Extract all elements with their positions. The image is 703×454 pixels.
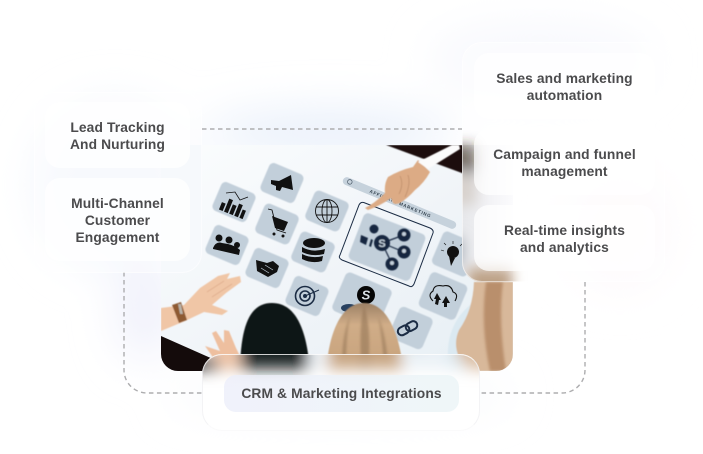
card: multi-channel engagement: Customer [85, 212, 150, 228]
card: sales automation [474, 53, 655, 119]
frosted glass: bottom panel [202, 354, 480, 382]
chart icon [219, 192, 248, 219]
right person hair [448, 282, 513, 371]
card: campaign management: management [521, 164, 608, 178]
panel: right features [462, 42, 665, 282]
network icon: S [378, 238, 386, 250]
card: real-time insights: and analytics [520, 240, 609, 254]
card: multi-channel engagement: Multi-Channel [71, 196, 164, 210]
network icon [360, 224, 410, 270]
megaphone icon [271, 175, 293, 191]
frosted glass: left panel [124, 272, 125, 273]
label: CRM & Marketing Integrations [224, 375, 459, 412]
lower hand [205, 330, 240, 371]
dollar icon [341, 286, 375, 312]
open hand and arm [161, 273, 241, 331]
blonde hair head [326, 303, 404, 375]
panel: integrations [202, 354, 480, 431]
frosted glass: right panel [462, 135, 521, 282]
people icon [213, 234, 240, 255]
card: multi-channel engagement: Engagement [75, 230, 159, 244]
panel: left features [34, 92, 202, 273]
search bar [342, 176, 457, 230]
icon tiles [204, 162, 480, 351]
globe icon [316, 200, 338, 222]
card: lead tracking: And Nurturing [70, 136, 165, 152]
target icon [296, 286, 319, 306]
card: lead tracking [45, 102, 190, 168]
card: sales automation: automation [527, 88, 602, 102]
card: real-time insights: Real-time insights [504, 222, 625, 238]
card: lead tracking: Lead Tracking [70, 120, 165, 134]
pointing hand and sleeve [365, 145, 460, 210]
link icon [396, 320, 419, 337]
database icon [302, 238, 325, 262]
handshake icon [256, 260, 279, 277]
card: real-time insights [474, 205, 655, 271]
label: CRM & Marketing Integrations: CRM & Marketing Integrations [241, 386, 442, 401]
dollar icon: S [362, 288, 371, 302]
card: campaign management [474, 129, 655, 195]
card: sales automation: Sales and marketing [496, 70, 633, 86]
bulb icon [440, 241, 462, 266]
card: multi-channel engagement [45, 178, 190, 261]
card: campaign management: Campaign and funnel [493, 146, 636, 162]
black hair head [240, 303, 310, 375]
cart icon [268, 209, 288, 238]
search bar: AFFILIATE MARKETING [369, 189, 432, 219]
photo: team pointing at marketing icons [161, 145, 513, 371]
table surface [161, 145, 513, 371]
selection frame [339, 202, 433, 287]
cloud icon [430, 286, 457, 307]
